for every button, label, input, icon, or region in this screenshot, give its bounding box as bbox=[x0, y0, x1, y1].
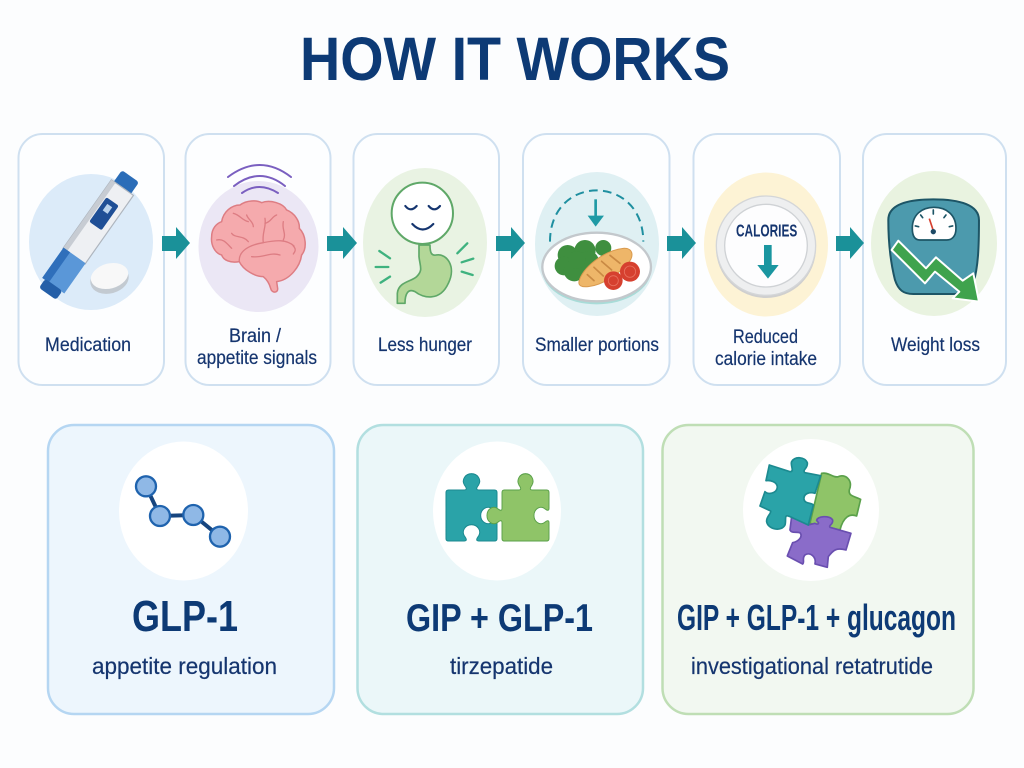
heading: GIP + GLP-1: GIP + GLP-1 bbox=[406, 597, 593, 640]
label: reduced calorie intake bbox=[715, 327, 817, 370]
panel: reduced calorie intake bbox=[694, 134, 840, 385]
label: reduced calorie intake: Reduced bbox=[733, 327, 798, 348]
arrow: brain to less hunger bbox=[327, 227, 357, 259]
heading: GLP-1: GLP-1 bbox=[132, 592, 238, 641]
icon: calories dial with down arrow bbox=[704, 172, 828, 316]
panel: brain and appetite signals bbox=[186, 134, 330, 385]
arrow: reduced calories to weight loss bbox=[836, 227, 864, 259]
label: less hunger: Less hunger bbox=[378, 335, 473, 356]
arrow: medication to brain bbox=[162, 227, 190, 259]
icon: plate of food with down arrow bbox=[535, 172, 659, 316]
arrow: smaller portions to reduced calories bbox=[667, 227, 696, 259]
text: appetite regulation: appetite regulation bbox=[92, 653, 277, 679]
icon: three puzzle pieces bbox=[743, 439, 879, 581]
icon: injection pen and pill bbox=[29, 168, 153, 310]
panel: medication bbox=[18, 134, 164, 385]
label: reduced calorie intake: calorie intake bbox=[715, 349, 817, 370]
icon: two puzzle pieces bbox=[433, 442, 561, 580]
label: brain / appetite signals bbox=[197, 326, 317, 369]
panel: less hunger bbox=[354, 134, 499, 385]
icon: smiling face and stomach bbox=[363, 168, 487, 317]
label: weight loss: Weight loss bbox=[891, 335, 980, 356]
label: smaller portions: Smaller portions bbox=[535, 335, 659, 356]
icon: scale with falling arrow bbox=[871, 171, 997, 316]
panel: smaller portions bbox=[523, 134, 670, 385]
text: tirzepatide: tirzepatide bbox=[450, 653, 553, 679]
icon: brain with signal waves bbox=[198, 165, 318, 312]
label: brain / appetite signals: Brain / bbox=[229, 326, 282, 347]
panel: weight loss bbox=[863, 134, 1006, 385]
text: investigational retatrutide: investigational retatrutide bbox=[691, 653, 933, 679]
label: brain / appetite signals: appetite signals bbox=[197, 348, 317, 369]
panel: GIP + GLP-1 + glucagon bbox=[662, 425, 974, 714]
title: HOW IT WORKS bbox=[300, 25, 730, 93]
panel: GIP + GLP-1 bbox=[358, 425, 643, 714]
label: calories: CALORIES bbox=[736, 221, 797, 241]
label: medication: Medication bbox=[45, 335, 131, 356]
panel: GLP-1 bbox=[48, 425, 334, 714]
icon: molecule chain bbox=[119, 442, 248, 580]
arrow: less hunger to smaller portions bbox=[496, 227, 525, 259]
